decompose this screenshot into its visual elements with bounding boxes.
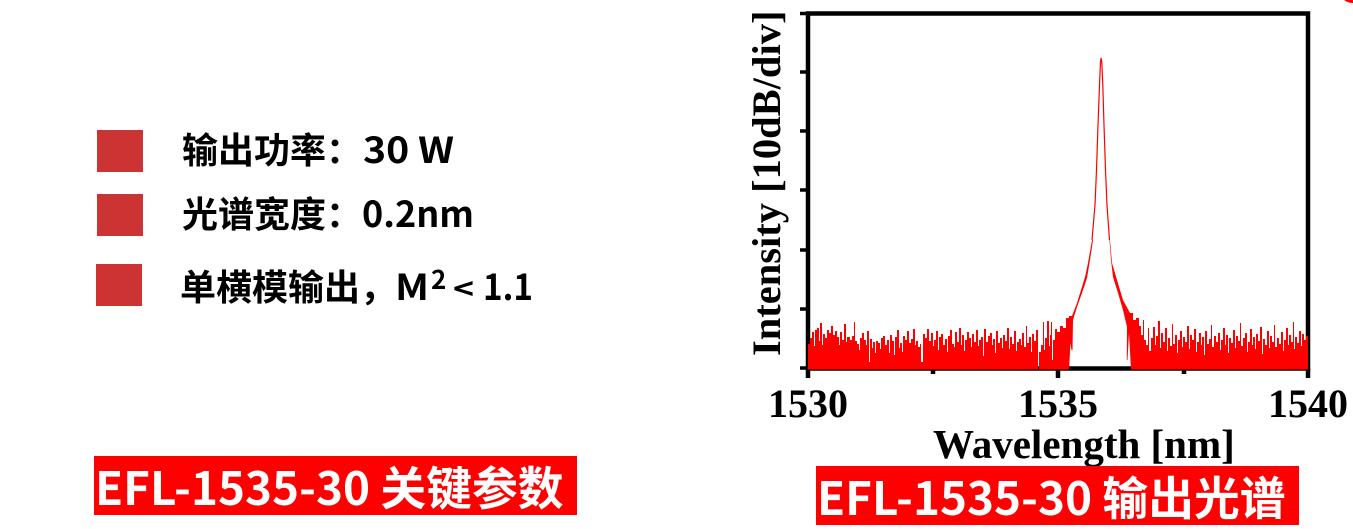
corner red fragment bbox=[1344, 0, 1353, 3]
text: single transverse mode: 1.1 bbox=[483, 259, 533, 311]
x-axis title: Wavelength [nm] bbox=[933, 421, 1235, 467]
banner: key parameters caption: EFL-1535-30 关键参数 bbox=[95, 453, 564, 519]
text: spectral width: 0.2nm bbox=[362, 186, 474, 238]
x-axis tick labels bbox=[768, 381, 1348, 426]
panel: key parameters list bbox=[96, 122, 533, 311]
x-axis tick labels: 1530 bbox=[768, 381, 848, 426]
text: single transverse mode: 2 bbox=[431, 260, 446, 297]
text: output power bbox=[182, 122, 454, 174]
banner: output spectrum caption: EFL-1535-30 输出光谱 bbox=[817, 463, 1286, 529]
text: single transverse mode: < bbox=[453, 265, 474, 309]
y-axis ticks bbox=[800, 14, 806, 368]
spectrum peak bbox=[1092, 58, 1110, 240]
text: single transverse mode bbox=[180, 259, 533, 311]
bullet: spectral width bbox=[97, 194, 143, 236]
bullet: single transverse mode bbox=[96, 264, 142, 306]
plot frame bbox=[808, 14, 1308, 368]
chart: output spectrum bbox=[744, 11, 1348, 467]
text: spectral width bbox=[182, 186, 474, 238]
x-axis tick labels: 1540 bbox=[1268, 381, 1348, 426]
x-axis ticks bbox=[808, 369, 1308, 378]
text: single transverse mode: M bbox=[395, 259, 429, 311]
text: output power: 输出功率： bbox=[182, 122, 362, 174]
x-axis tick labels: 1535 bbox=[1018, 381, 1098, 426]
text: single transverse mode: 单横模输出， bbox=[180, 259, 396, 311]
bullet: output power bbox=[97, 130, 143, 172]
text: spectral width: 光谱宽度： bbox=[182, 186, 362, 238]
spectrum noise floor and skirts bbox=[808, 240, 1308, 370]
text: output power: 30 W bbox=[363, 122, 454, 174]
y-axis title: Intensity [10dB/div] bbox=[744, 11, 789, 356]
